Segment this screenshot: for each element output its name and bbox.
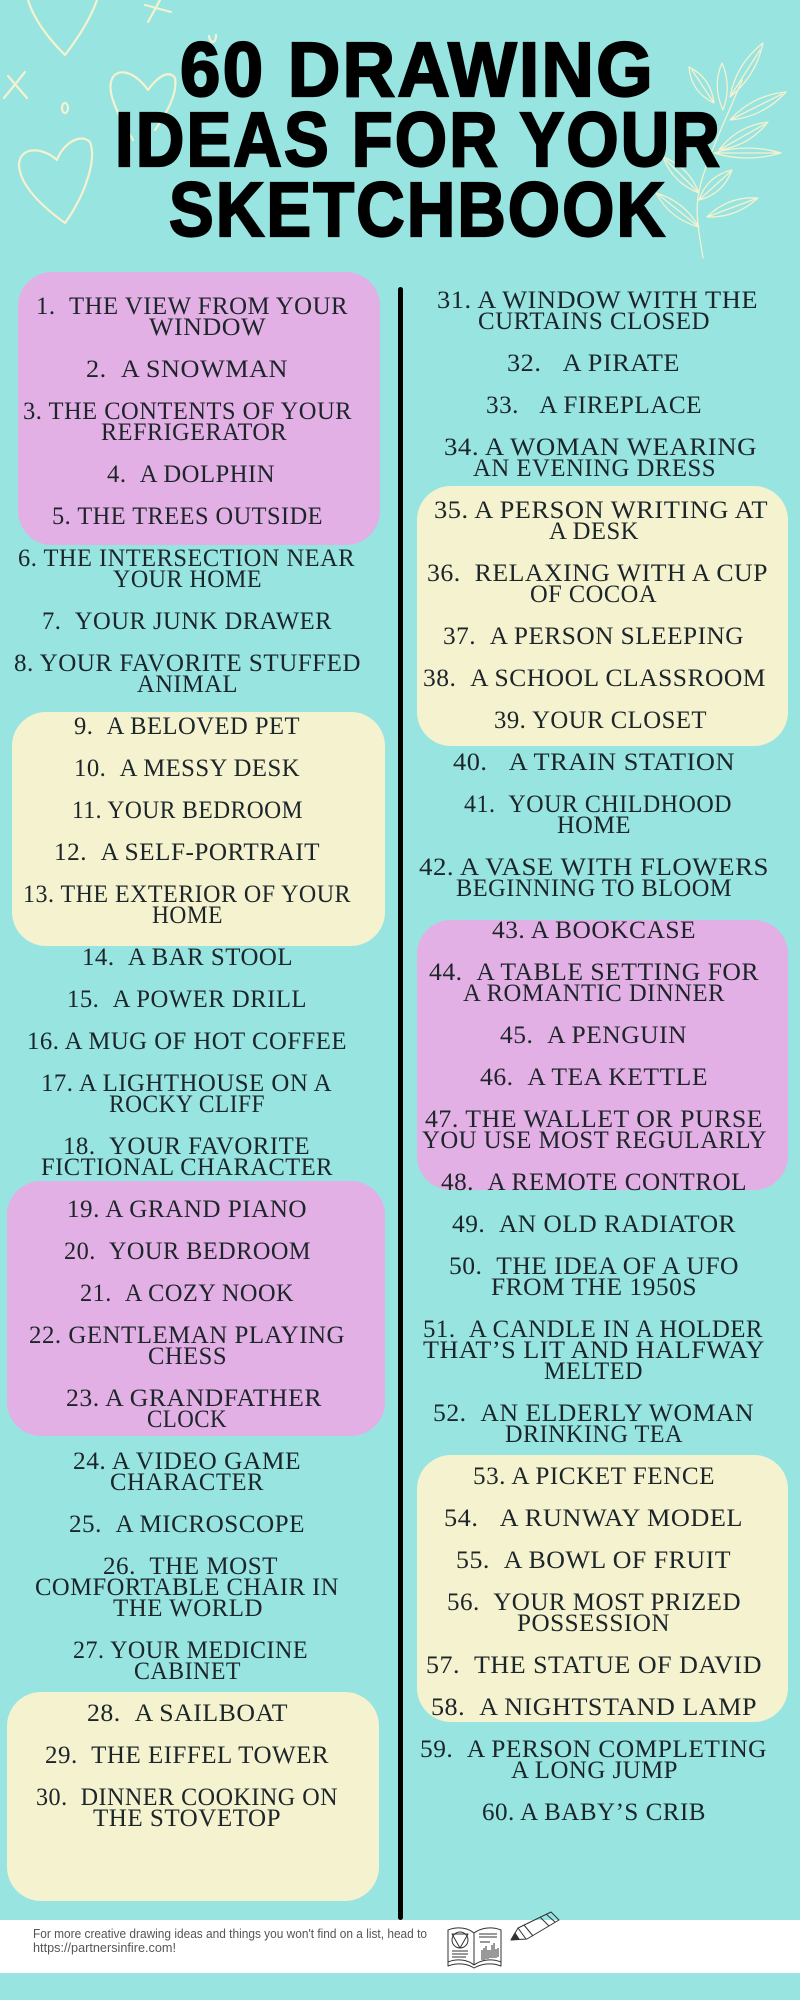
- item 10: 10. A MESSY DESK: [74, 753, 300, 782]
- item 42: BEGINNING TO BLOOM: [456, 873, 732, 902]
- item 42: 42. A VASE WITH FLOWERS: [419, 852, 769, 881]
- item 6: 6. THE INTERSECTION NEAR: [18, 543, 355, 572]
- item 5: 5. THE TREES OUTSIDE: [52, 501, 323, 530]
- item 8: ANIMAL: [137, 669, 238, 698]
- item 51: MELTED: [544, 1356, 643, 1385]
- item 51: 51. A CANDLE IN A HOLDER: [423, 1314, 763, 1343]
- title: 60 DRAWING: [180, 27, 655, 113]
- item 54: 54. A RUNWAY MODEL: [444, 1503, 743, 1532]
- panel: pink items 1-5: [18, 272, 380, 545]
- item 31: 31. A WINDOW WITH THE: [437, 285, 758, 314]
- panel: cream items 53-58: [417, 1455, 788, 1722]
- title: SKETCHBOOK: [169, 167, 667, 253]
- item 8: 8. YOUR FAVORITE STUFFED: [14, 648, 361, 677]
- item 50: [449, 1251, 739, 1301]
- icon: open book: [448, 1928, 501, 1968]
- item 30: 30. DINNER COOKING ON: [36, 1782, 338, 1811]
- item 59: [420, 1734, 767, 1784]
- item 13: [23, 879, 351, 929]
- title: IDEAS FOR YOUR: [115, 97, 722, 183]
- item 52: DRINKING TEA: [505, 1419, 683, 1448]
- item 38: 38. A SCHOOL CLASSROOM: [423, 663, 766, 692]
- item 44: A ROMANTIC DINNER: [463, 978, 725, 1007]
- item 26: COMFORTABLE CHAIR IN: [35, 1572, 339, 1601]
- item 45: 45. A PENGUIN: [500, 1020, 687, 1049]
- item 41: [464, 789, 732, 839]
- item 60: 60. A BABY’S CRIB: [482, 1797, 706, 1826]
- item 9: 9. A BELOVED PET: [74, 711, 300, 740]
- item 35: A DESK: [549, 516, 639, 545]
- footer band: [0, 1920, 800, 1973]
- decoration: leaf branch: [656, 43, 786, 258]
- item 13: 13. THE EXTERIOR OF YOUR: [23, 879, 351, 908]
- item 35: [434, 495, 768, 545]
- item 3: [23, 396, 352, 446]
- item 28: 28. A SAILBOAT: [87, 1698, 288, 1727]
- panel: cream items 35-39: [417, 486, 788, 746]
- item 26: THE WORLD: [113, 1593, 263, 1622]
- item 36: [427, 558, 768, 608]
- item 2: 2. A SNOWMAN: [86, 354, 288, 383]
- item 56: [447, 1587, 741, 1637]
- item 43: 43. A BOOKCASE: [492, 915, 696, 944]
- item 18: 18. YOUR FAVORITE: [63, 1131, 310, 1160]
- item 18: FICTIONAL CHARACTER: [41, 1152, 333, 1181]
- item 22: CHESS: [148, 1341, 227, 1370]
- item 58: 58. A NIGHTSTAND LAMP: [431, 1692, 757, 1721]
- item 11: 11. YOUR BEDROOM: [72, 795, 303, 824]
- item 35: 35. A PERSON WRITING AT: [434, 495, 768, 524]
- item 27: CABINET: [134, 1656, 241, 1685]
- item 50: 50. THE IDEA OF A UFO: [449, 1251, 739, 1280]
- item 52: 52. AN ELDERLY WOMAN: [433, 1398, 754, 1427]
- item 48: 48. A REMOTE CONTROL: [441, 1167, 747, 1196]
- item 17: [41, 1068, 332, 1118]
- title: [115, 27, 722, 253]
- item 59: A LONG JUMP: [511, 1755, 678, 1784]
- item 50: FROM THE 1950S: [491, 1272, 697, 1301]
- item 1: [36, 291, 348, 341]
- item 26: [35, 1551, 339, 1622]
- left column list: [14, 291, 361, 1832]
- item 13: HOME: [152, 900, 223, 929]
- item 51: [423, 1314, 765, 1385]
- item 30: THE STOVETOP: [93, 1803, 281, 1832]
- item 32: 32. A PIRATE: [507, 348, 680, 377]
- item 42: [419, 852, 769, 902]
- item 56: 56. YOUR MOST PRIZED: [447, 1587, 741, 1616]
- column divider: [398, 287, 403, 1920]
- item 24: [73, 1446, 301, 1496]
- item 31: CURTAINS CLOSED: [478, 306, 710, 335]
- item 3: REFRIGERATOR: [101, 417, 287, 446]
- item 36: OF COCOA: [530, 579, 657, 608]
- item 17: 17. A LIGHTHOUSE ON A: [41, 1068, 332, 1097]
- item 47: 47. THE WALLET OR PURSE: [425, 1104, 763, 1133]
- item 27: [73, 1635, 308, 1685]
- item 6: [18, 543, 355, 593]
- item 23: 23. A GRANDFATHER: [66, 1383, 322, 1412]
- item 19: 19. A GRAND PIANO: [67, 1194, 307, 1223]
- item 47: [422, 1104, 767, 1154]
- item 4: 4. A DOLPHIN: [107, 459, 275, 488]
- item 14: 14. A BAR STOOL: [82, 942, 293, 971]
- item 34: 34. A WOMAN WEARING: [444, 432, 757, 461]
- item 15: 15. A POWER DRILL: [67, 984, 307, 1013]
- icon: pencil: [511, 1912, 559, 1940]
- item 52: [433, 1398, 754, 1448]
- item 6: YOUR HOME: [113, 564, 262, 593]
- item 41: HOME: [557, 810, 631, 839]
- item 8: [14, 648, 361, 698]
- item 53: 53. A PICKET FENCE: [473, 1461, 715, 1490]
- item 7: 7. YOUR JUNK DRAWER: [42, 606, 332, 635]
- item 27: 27. YOUR MEDICINE: [73, 1635, 308, 1664]
- item 44: 44. A TABLE SETTING FOR: [429, 957, 759, 986]
- item 55: 55. A BOWL OF FRUIT: [456, 1545, 731, 1574]
- item 49: 49. AN OLD RADIATOR: [452, 1209, 736, 1238]
- item 37: 37. A PERSON SLEEPING: [443, 621, 744, 650]
- item 59: 59. A PERSON COMPLETING: [420, 1734, 767, 1763]
- item 3: 3. THE CONTENTS OF YOUR: [23, 396, 352, 425]
- item 18: [41, 1131, 333, 1181]
- item 33: 33. A FIREPLACE: [486, 390, 702, 419]
- item 34: [444, 432, 757, 482]
- panel: cream items 28-30: [7, 1692, 379, 1901]
- item 1: WINDOW: [149, 312, 266, 341]
- footer text: [33, 1927, 427, 1955]
- item 20: 20. YOUR BEDROOM: [64, 1236, 311, 1265]
- item 22: [29, 1320, 345, 1370]
- item 12: 12. A SELF-PORTRAIT: [54, 837, 320, 866]
- panel: pink items 43-48: [417, 920, 788, 1190]
- item 51: THAT’S LIT AND HALFWAY: [423, 1335, 765, 1364]
- item 24: 24. A VIDEO GAME: [73, 1446, 301, 1475]
- item 47: YOU USE MOST REGULARLY: [422, 1125, 767, 1154]
- item 34: AN EVENING DRESS: [473, 453, 716, 482]
- item 31: [437, 285, 758, 335]
- item 56: POSSESSION: [517, 1608, 670, 1637]
- item 30: [36, 1782, 338, 1832]
- item 44: [429, 957, 759, 1007]
- panel: pink items 19-23: [7, 1181, 385, 1436]
- item 41: 41. YOUR CHILDHOOD: [464, 789, 732, 818]
- item 23: CLOCK: [147, 1404, 227, 1433]
- item 22: 22. GENTLEMAN PLAYING: [29, 1320, 345, 1349]
- item 46: 46. A TEA KETTLE: [480, 1062, 708, 1091]
- item 29: 29. THE EIFFEL TOWER: [45, 1740, 329, 1769]
- footer text: For more creative drawing ideas and things you won't find on a list, head to: [33, 1927, 427, 1941]
- item 16: 16. A MUG OF HOT COFFEE: [27, 1026, 347, 1055]
- footer text: https://partnersinfire.com!: [33, 1941, 176, 1955]
- right column list: [419, 285, 769, 1826]
- item 17: ROCKY CLIFF: [109, 1089, 265, 1118]
- item 24: CHARACTER: [110, 1467, 264, 1496]
- item 23: [66, 1383, 322, 1433]
- item 21: 21. A COZY NOOK: [80, 1278, 294, 1307]
- decoration: hearts and doodles: [4, 0, 216, 223]
- item 25: 25. A MICROSCOPE: [69, 1509, 305, 1538]
- item 57: 57. THE STATUE OF DAVID: [426, 1650, 762, 1679]
- item 26: 26. THE MOST: [103, 1551, 278, 1580]
- item 1: 1. THE VIEW FROM YOUR: [36, 291, 348, 320]
- item 36: 36. RELAXING WITH A CUP: [427, 558, 768, 587]
- item 39: 39. YOUR CLOSET: [494, 705, 707, 734]
- item 40: 40. A TRAIN STATION: [453, 747, 735, 776]
- panel: cream items 9-13: [12, 712, 385, 946]
